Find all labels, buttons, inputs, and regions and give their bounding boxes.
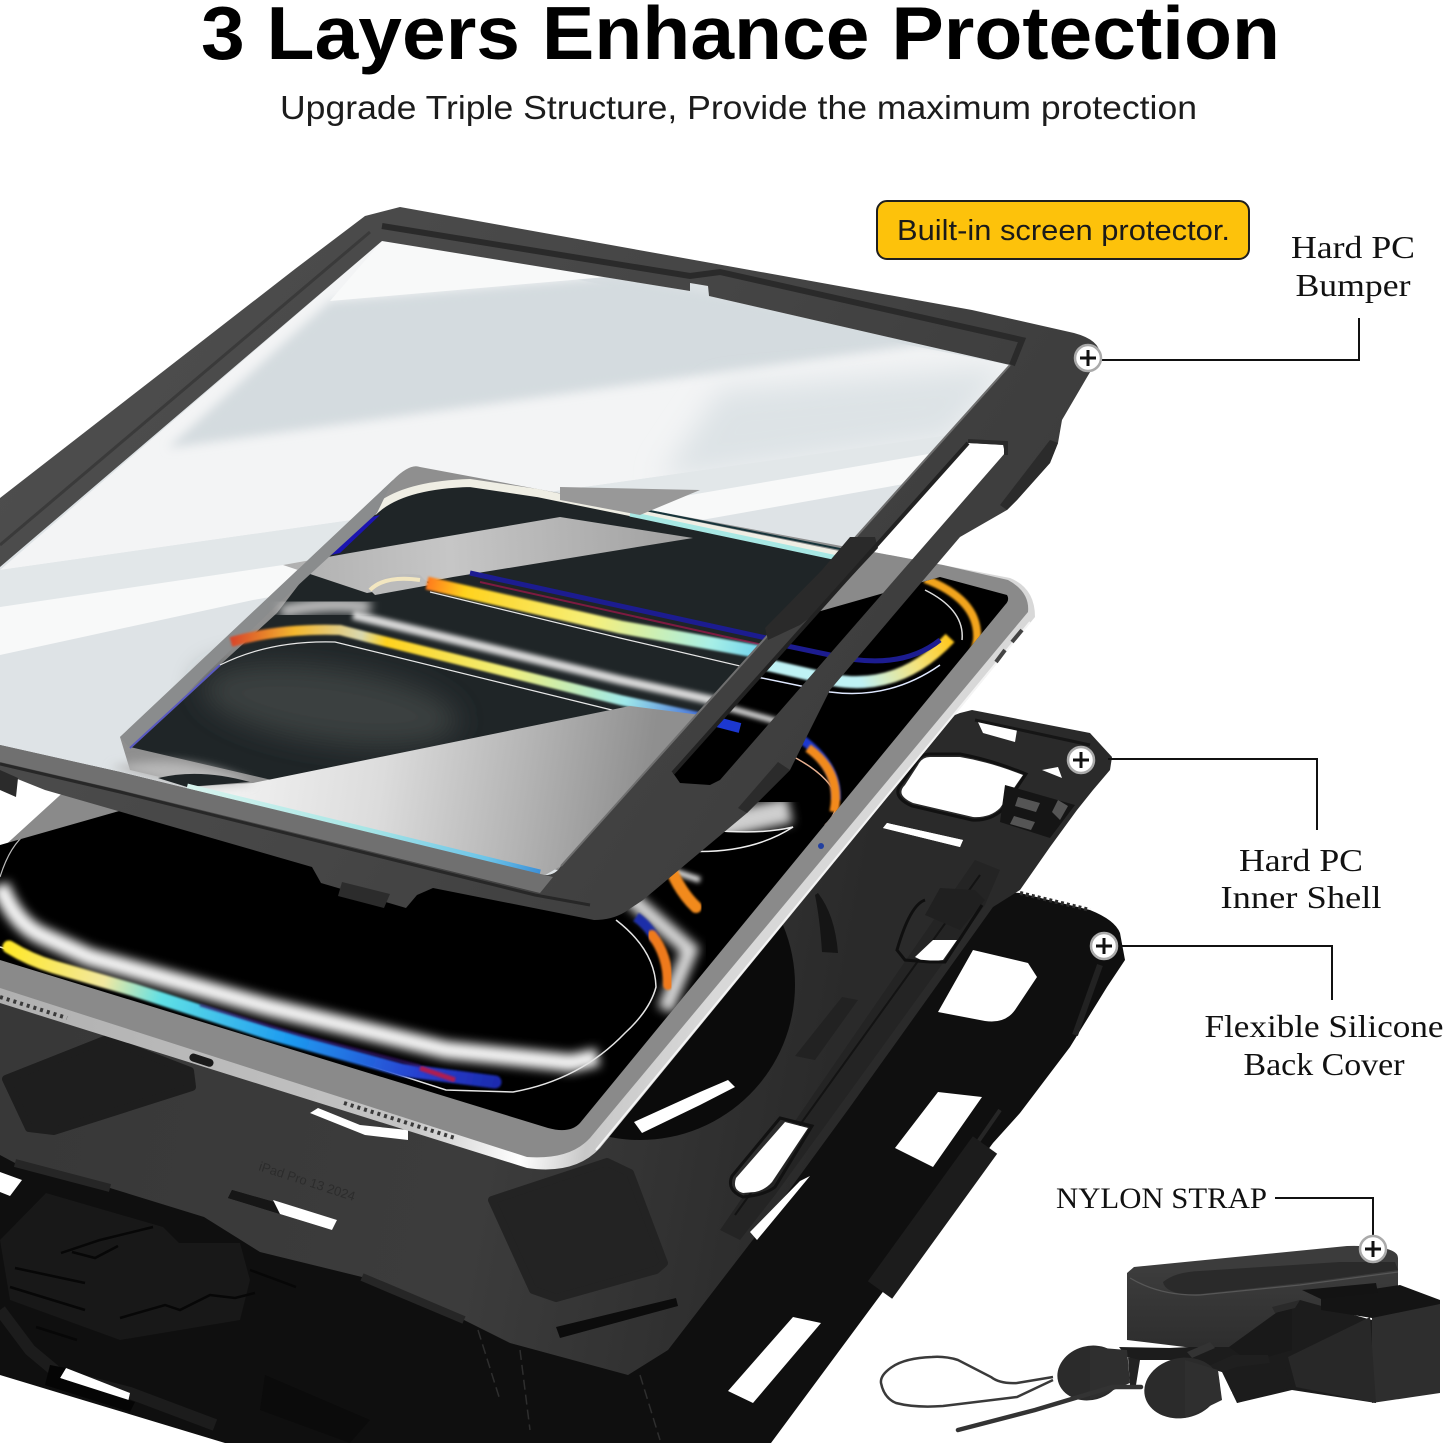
label: hard PC bumper: Bumper — [1296, 267, 1411, 303]
tablet screen — [0, 577, 1008, 1130]
label: hard PC inner shell: Hard PC — [1239, 842, 1363, 878]
icon: rotating handle disc — [485, 830, 795, 1140]
strap inner loop — [1163, 1262, 1398, 1295]
bumper right clips — [1000, 440, 1058, 510]
leader: bumper — [1100, 318, 1359, 360]
white band below upper panel — [353, 615, 747, 708]
layer: tablet — [0, 552, 1035, 1170]
shell engraving: iPad Pro 13 2024 — [257, 1159, 357, 1204]
shell small triangle opening — [1042, 767, 1062, 778]
band over dark upper area — [283, 517, 693, 593]
glass white band — [0, 452, 940, 655]
glass right tint — [671, 364, 998, 474]
wallpaper glow band — [0, 885, 598, 1063]
buckle — [1233, 1367, 1292, 1403]
lower glare — [199, 706, 696, 875]
shell window rim — [898, 754, 1026, 820]
marker: bumper — [1075, 345, 1101, 371]
strap top slider — [1302, 1283, 1378, 1299]
lanyard cord — [881, 1357, 1053, 1407]
upper stripe outside window — [690, 638, 950, 682]
marker: silicone back cover — [1091, 933, 1117, 959]
label: hard PC inner shell: Inner Shell — [1220, 879, 1382, 915]
strap front band — [1372, 1302, 1440, 1403]
callout: built-in screen protector — [877, 201, 1249, 259]
tablet grey bezel — [0, 467, 1028, 1157]
middle stripe outside window — [716, 718, 742, 733]
strap buckle backing — [1127, 1300, 1376, 1403]
blue wedge — [331, 515, 380, 555]
marker: inner shell — [1068, 747, 1094, 773]
cyan bottom stripe — [187, 787, 540, 873]
label: nylon strap: NYLON STRAP — [1056, 1182, 1267, 1215]
dark screen — [132, 487, 832, 780]
small dark shape — [158, 774, 250, 787]
label: flexible silicone back cover — [1204, 1008, 1444, 1082]
strap rear band — [1127, 1246, 1398, 1360]
shell pad right — [492, 1162, 664, 1298]
bumper bottom clip — [338, 882, 390, 908]
bubble — [372, 582, 428, 595]
layer: hard PC bumper frame — [0, 207, 1100, 920]
lower colour stripe — [9, 947, 495, 1082]
bumper lower bevel — [0, 745, 553, 893]
shell slot with white opening — [915, 940, 957, 962]
grey glow — [280, 605, 370, 612]
bumper side latch — [765, 537, 878, 640]
shell port cluster — [1000, 785, 1075, 838]
glass top white reflection — [330, 242, 604, 301]
orange flames — [670, 867, 696, 907]
top pale stripe — [376, 479, 838, 555]
slot inner wall — [673, 443, 968, 773]
layer: flexible silicone back cover — [0, 885, 1125, 1443]
dark lens — [683, 827, 793, 852]
shell vent slit — [228, 1190, 337, 1230]
left grey wedge — [120, 480, 393, 748]
glass band — [0, 434, 957, 607]
leather tab left — [1051, 1338, 1140, 1408]
glare wedge above — [560, 487, 700, 515]
leather tab right — [1139, 1351, 1232, 1425]
leader: inner shell — [1108, 759, 1317, 830]
screen wallpaper — [0, 579, 977, 1092]
shell side rail — [720, 860, 1000, 1240]
bumper inner lip — [382, 226, 1022, 365]
middle colour stripe — [228, 623, 699, 714]
leather wedge — [1288, 1317, 1376, 1403]
label: hard PC bumper — [1291, 229, 1415, 303]
tablet speaker and port details — [0, 997, 67, 1018]
marker: nylon strap — [1360, 1236, 1386, 1262]
right glow fields — [610, 880, 690, 1010]
upper colour stripe — [470, 570, 766, 640]
glass blue-grey reflection — [172, 280, 922, 449]
tablet seen through glass — [114, 466, 842, 875]
kickstand recess — [0, 1193, 250, 1340]
left webbing — [1229, 1303, 1292, 1362]
bezel wedge — [120, 466, 842, 870]
label: flexible silicone back cover: Flexible Silicone — [1204, 1008, 1444, 1044]
shell pad left — [6, 1039, 192, 1131]
upper right curve — [922, 578, 983, 648]
nylon strap product — [881, 1246, 1440, 1430]
label: hard PC inner shell — [1220, 842, 1382, 915]
tablet silver body — [0, 467, 1035, 1169]
leader: silicone back cover — [1116, 946, 1332, 1000]
label: hard PC bumper: Hard PC — [1291, 229, 1415, 265]
glass upper white field — [0, 241, 1010, 570]
layer: hard PC inner shell — [0, 710, 1112, 1375]
callout: built-in screen protector: Built-in screen protector. — [897, 215, 1230, 247]
leader: nylon strap — [1275, 1198, 1373, 1236]
layer: built-in screen protector glass — [0, 230, 1020, 880]
lighter panel centre — [196, 649, 464, 761]
lanyard tail — [958, 1387, 1141, 1430]
label: flexible silicone back cover: Back Cover — [1244, 1046, 1405, 1082]
subtitle: Upgrade Triple Structure, Provide the maximum protection — [280, 89, 1197, 126]
wallpaper outline — [0, 920, 656, 1092]
glass base — [0, 230, 1020, 880]
